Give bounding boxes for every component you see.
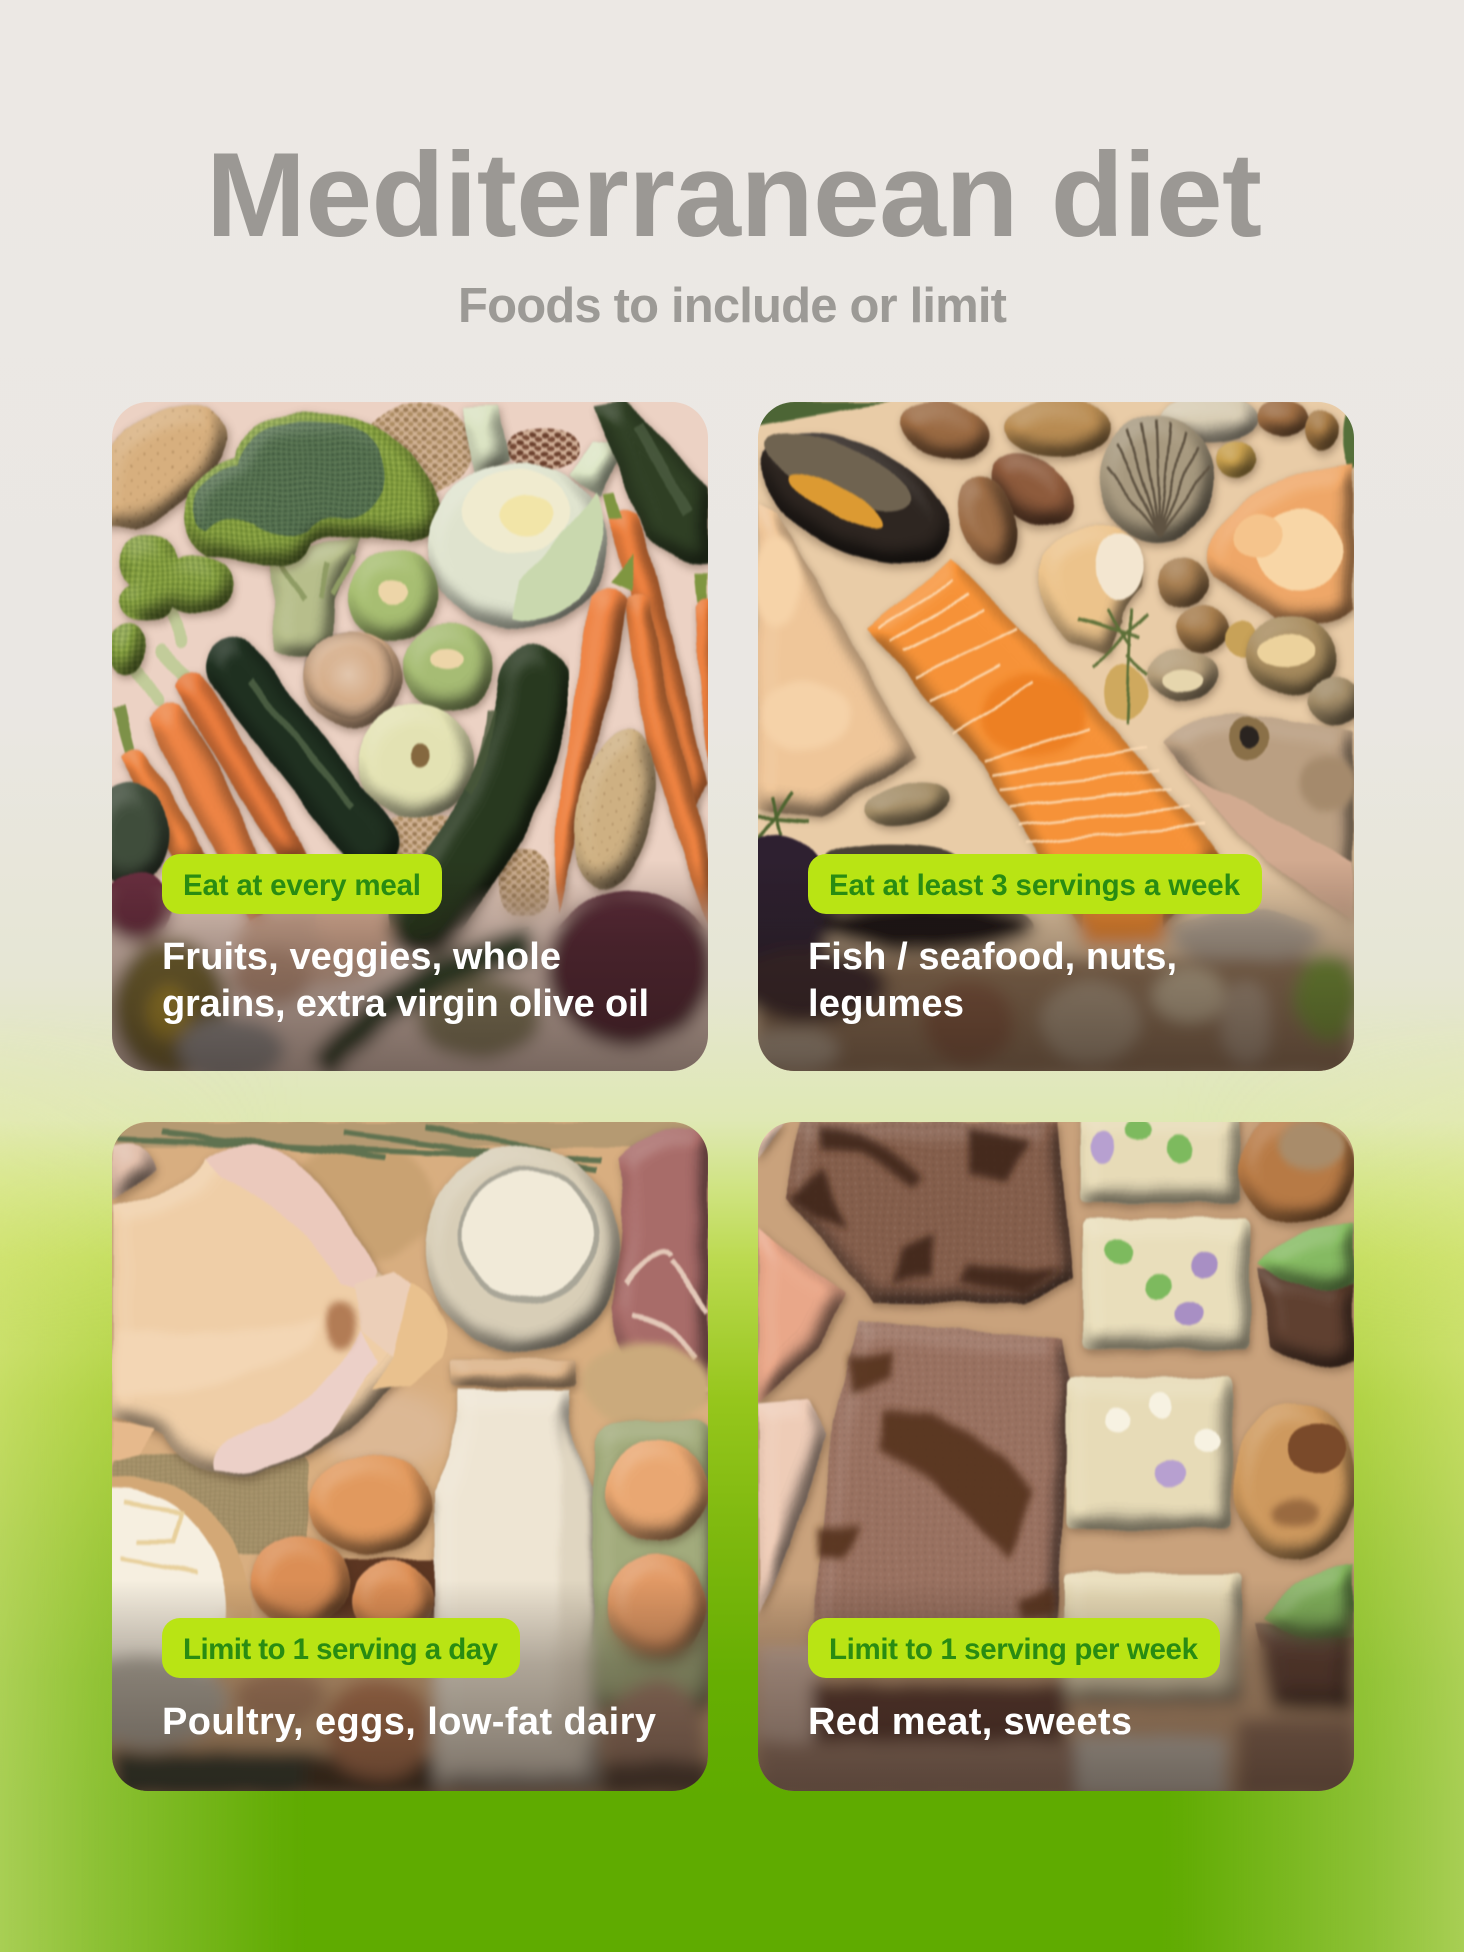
panel: limit to 1 serving per week [740,1100,1380,1820]
pill: eat at every meal: Eat at every meal [183,869,421,902]
description: fish, seafood: legumes [808,983,964,1025]
description: fish, seafood: Fish / seafood, nuts, [808,936,1177,978]
description: poultry, eggs, dairy: Poultry, eggs, low-fat dairy [162,1701,656,1743]
photo: poultry, eggs, dairy [112,1122,708,1791]
pill: limit to 1 serving per week [808,1618,1220,1678]
pill: limit to 1 serving a day: Limit to 1 serving a day [183,1633,499,1666]
pill: eat at least 3 servings [808,854,1262,914]
pill: limit to 1 serving per week: Limit to 1 serving per week [829,1633,1199,1666]
description: red meat, sweets: Red meat, sweets [808,1701,1132,1743]
photo: red meat and sweets [740,1100,1380,1820]
panel: limit to 1 serving a day [112,1122,708,1791]
pill: eat at every meal [162,854,442,914]
description: fruits, veggies [162,936,649,1025]
pill: eat at least 3 servings: Eat at least 3 servings a week [829,869,1241,902]
photo: fish and nuts [758,402,1354,1071]
pill: limit to 1 serving a day [162,1618,520,1678]
subtitle: Foods to include or limit [458,279,1007,333]
photo: vegetables [112,402,708,1071]
panel: eat at least 3 servings a week [758,402,1354,1071]
description: fruits, veggies: Fruits, veggies, whole [162,936,561,978]
description: fruits, veggies: grains, extra virgin olive oil [162,983,649,1025]
panel: eat at every meal [112,402,708,1071]
background gradient [0,832,1464,1952]
description: fish, seafood [808,936,1177,1025]
title: Mediterranean diet [206,128,1262,262]
